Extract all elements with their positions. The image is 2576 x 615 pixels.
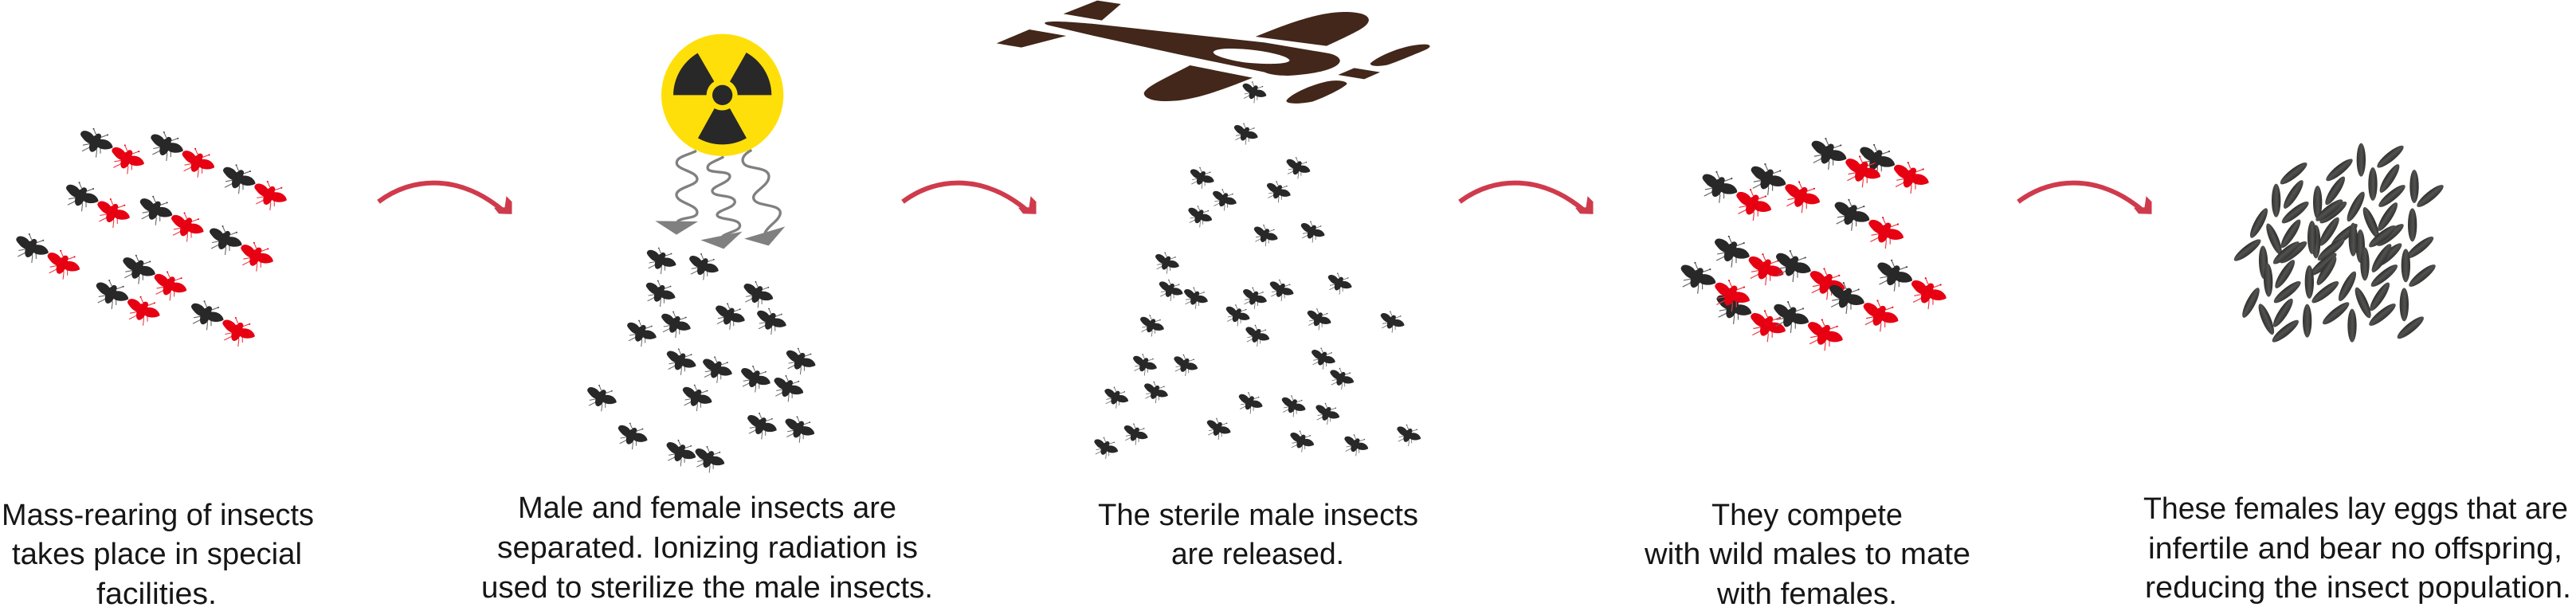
text: step 4 caption: They compete: [1711, 499, 1903, 532]
text: step 1 caption: facilities.: [96, 578, 217, 611]
text: step 4 caption: with wild males to mate: [1644, 538, 1970, 571]
text: step 2 caption: used to sterilize the male insects.: [481, 571, 933, 605]
text: step 1 caption: takes place in special: [12, 538, 302, 571]
text: step 2 caption: separated. Ionizing radiation is: [497, 531, 918, 565]
text: step 2 caption: [481, 492, 933, 605]
arrow: step 2 to 3: [903, 183, 1036, 214]
panel: radiation sterilization: [587, 34, 815, 472]
arrow: step 1 to 2: [378, 183, 512, 214]
text: step 3 caption: [1098, 499, 1418, 571]
text: step 3 caption: are released.: [1171, 538, 1344, 571]
arrow: step 4 to 5: [2018, 183, 2151, 214]
arrow: step 3 to 4: [1460, 183, 1594, 214]
icon: released insects: [1094, 81, 1421, 459]
icon: radiation symbol: [661, 34, 783, 156]
text: step 4 caption: with females.: [1716, 578, 1897, 611]
panel: sterile insect release: [997, 1, 1430, 459]
text: step 1 caption: Mass-rearing of insects: [2, 499, 314, 532]
panel: mass-rearing insects: [16, 128, 287, 347]
icon: male insects: [587, 248, 815, 472]
text: step 5 caption: These females lay eggs that are: [2143, 492, 2568, 526]
panel: infertile eggs: [2232, 143, 2446, 345]
text: step 2 caption: Male and female insects are: [518, 492, 896, 525]
text: step 3 caption: The sterile male insects: [1098, 499, 1418, 532]
text: step 5 caption: infertile and bear no offspring,: [2148, 532, 2562, 566]
text: step 5 caption: reducing the insect population.: [2145, 571, 2571, 605]
icon: airplane: [997, 1, 1430, 104]
text: step 1 caption: [2, 499, 314, 611]
panel: insects competing and mating: [1681, 138, 1947, 351]
text: step 4 caption: [1644, 499, 1970, 611]
icon: radiation rays: [655, 150, 785, 249]
text: step 5 caption: [2143, 492, 2571, 605]
